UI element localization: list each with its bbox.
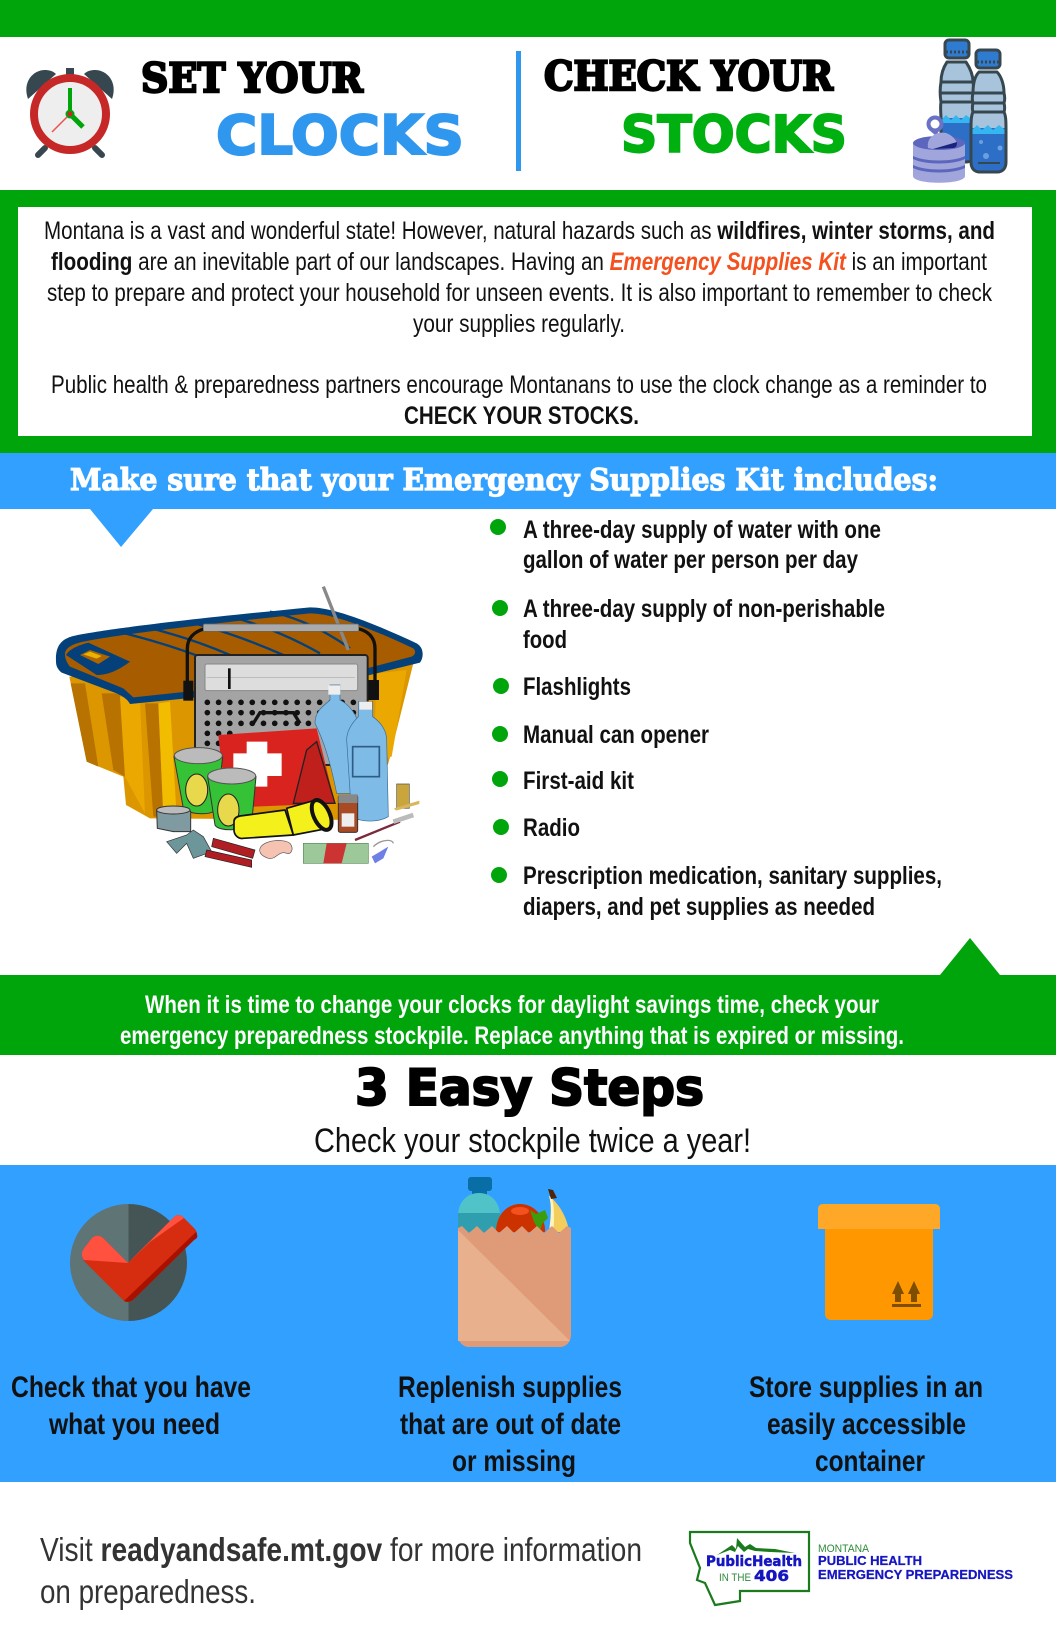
pointer triangle [90, 509, 153, 547]
front bottle [971, 50, 1006, 172]
step 2 text: or missing [452, 1445, 576, 1478]
item: water [490, 516, 881, 574]
step 1 icon: checkmark [70, 1204, 197, 1321]
item: first-aid kit: First-aid kit [523, 767, 635, 795]
step 1 text: what you need [48, 1408, 220, 1441]
intro text block: flooding are an inevitable part of our landscapes. Having an Emergency Supplies Kit is an important [51, 248, 987, 276]
heading: check your: CHECK YOUR [544, 53, 834, 100]
logo: public health in the 406: IN THE [719, 1572, 751, 1584]
green banner: reminder: emergency preparedness stockpile. Replace anything that is expired or missing. [120, 1022, 904, 1050]
tin can [913, 118, 965, 183]
step 1 text [11, 1371, 251, 1441]
heading: clocks: CLOCKS [216, 104, 464, 167]
item: can opener: Manual can opener [523, 721, 709, 749]
step 2 text: that are out of date [400, 1408, 621, 1441]
heading: set your: SET YOUR [141, 55, 364, 102]
illustration: emergency supplies kit [56, 587, 423, 867]
item: water: gallon of water per person per day [523, 546, 858, 574]
step 3 text [749, 1371, 983, 1478]
blue banner: kit heading: Make sure that your Emergency Supplies Kit includes: [70, 463, 938, 498]
item: food: food [523, 626, 567, 654]
icon: alarm clock [26, 68, 114, 155]
icon: water bottles and can [913, 40, 1006, 183]
footer text [40, 1531, 642, 1610]
intro text block: CHECK YOUR STOCKS. [404, 402, 639, 430]
logo: public health in the 406: 406 [754, 1567, 789, 1585]
item: radio: Radio [523, 814, 580, 842]
logo: program name [818, 1543, 1013, 1582]
item: food [492, 595, 885, 654]
item: prescriptions and other supplies: diapers, and pet supplies as needed [523, 893, 875, 921]
intro text block [44, 217, 995, 430]
step 1 text: Check that you have [11, 1371, 251, 1404]
green banner: reminder [0, 975, 1056, 1055]
intro text block: your supplies regularly. [413, 310, 625, 338]
item: first-aid kit [492, 767, 635, 795]
heading: 3 easy steps: 3 Easy Steps [355, 1059, 704, 1117]
item: flashlights [493, 673, 631, 701]
step 3 text: Store supplies in an [749, 1371, 983, 1404]
step 2 text: Replenish supplies [398, 1371, 622, 1404]
blue banner: kit heading [0, 453, 1056, 509]
item: flashlights: Flashlights [523, 673, 631, 701]
subheading: Check your stockpile twice a year! [314, 1122, 751, 1160]
green panel with intro box [0, 190, 1056, 453]
heading: stocks: STOCKS [621, 106, 847, 165]
pointer triangle up [940, 938, 1000, 975]
logo: program name: MONTANA [818, 1543, 870, 1555]
logo: program name: PUBLIC HEALTH [818, 1553, 922, 1568]
step 2 text [398, 1371, 622, 1478]
panel: three steps [0, 1165, 1056, 1482]
logo: public health in the 406: PublicHealth [706, 1554, 802, 1570]
item: food: A three-day supply of non-perishable [523, 595, 885, 623]
step 3 text: container [815, 1445, 925, 1478]
step 3 text: easily accessible [767, 1408, 966, 1441]
vertical divider [516, 51, 521, 171]
intro text block: Montana is a vast and wonderful state! However, natural hazards such as wildfires, winter storms, and [44, 217, 995, 245]
top green band [0, 0, 1056, 37]
checklist of supplies [490, 516, 942, 921]
step 3 icon: storage box [818, 1204, 940, 1320]
step 2 icon: grocery bag [458, 1177, 571, 1347]
item: water: A three-day supply of water with one [523, 516, 881, 544]
item: prescriptions and other supplies [491, 862, 942, 921]
logo: program name: EMERGENCY PREPAREDNESS [818, 1567, 1013, 1582]
logo: public health in the 406 [690, 1532, 809, 1605]
item: prescriptions and other supplies: Prescription medication, sanitary supplies, [523, 862, 942, 890]
item: radio [493, 814, 580, 842]
footer text: on preparedness. [40, 1573, 256, 1610]
green banner: reminder: When it is time to change your clocks for daylight savings time, check your [145, 991, 879, 1019]
back bottle [940, 40, 974, 162]
footer text: Visit readyandsafe.mt.gov for more information [40, 1531, 642, 1568]
